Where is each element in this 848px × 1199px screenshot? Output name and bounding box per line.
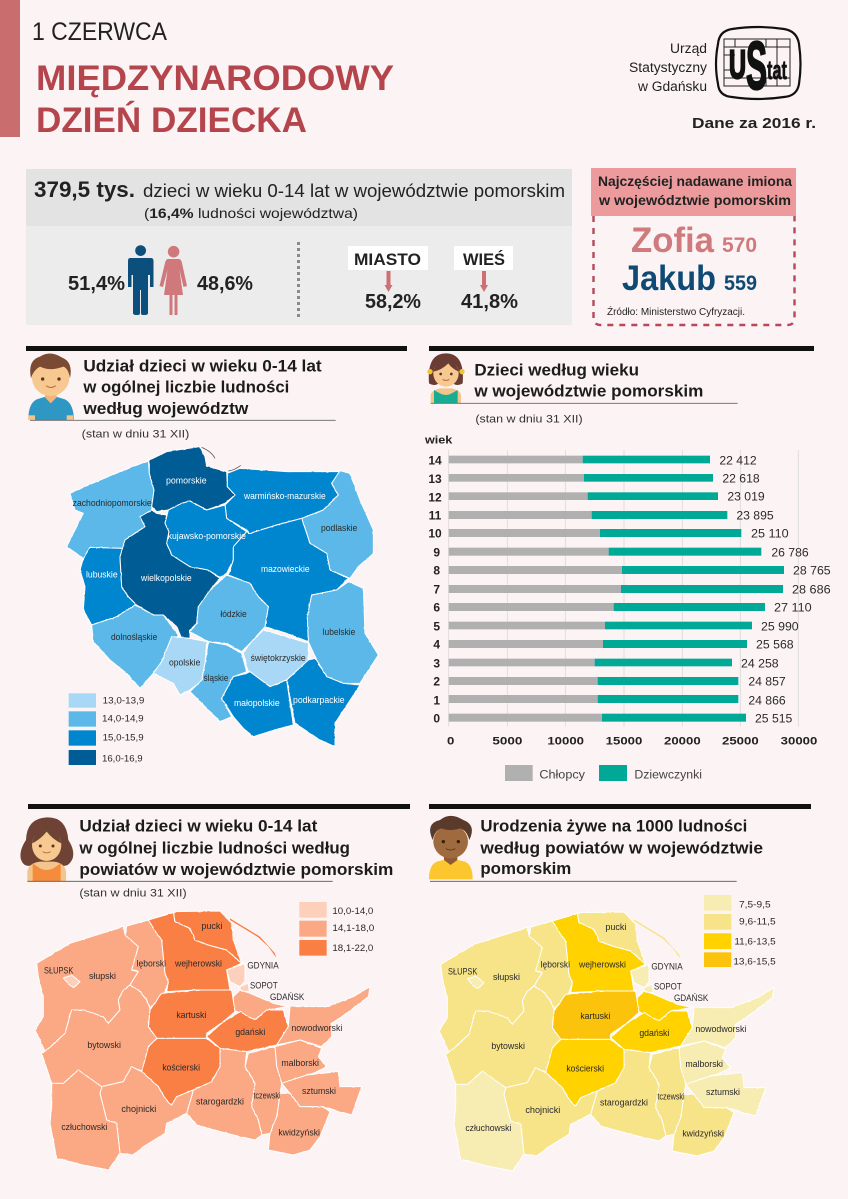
bar chart: 28 686 <box>792 583 831 597</box>
date note: (stan w dniu 31 XII) <box>82 429 190 441</box>
logo: US tat: S <box>746 28 767 104</box>
bar chart: 1 <box>433 693 440 707</box>
map legend <box>704 895 776 967</box>
choropleth map of Poland: zachodniopomorskie <box>73 498 152 508</box>
map legend: 14,0-14,9 <box>102 714 144 724</box>
choropleth map of Poland: łódzkie <box>220 609 247 619</box>
bar chart: 2 <box>433 675 440 689</box>
map: counties, children share: bytowski <box>87 1040 121 1050</box>
map: counties, children share: gdański <box>235 1027 265 1037</box>
choropleth map of Poland: kujawsko-pomorskie <box>168 531 246 541</box>
icon: female figure <box>160 246 187 315</box>
section heading: Dzieci według wieku <box>474 362 639 380</box>
bar chart: 25 990 <box>761 620 799 634</box>
panel: popular names <box>591 168 796 325</box>
date note: (stan w dniu 31 XII) <box>475 414 583 426</box>
map: counties, live births: człuchowski <box>465 1123 511 1133</box>
map: counties, children share: kwidzyński <box>278 1128 320 1138</box>
bar chart: 24 866 <box>748 693 786 707</box>
map: counties, children share: SŁUPSK <box>44 966 73 976</box>
bar chart: 25000 <box>722 735 759 747</box>
bar chart: 24 857 <box>748 675 786 689</box>
bar chart: 11 <box>429 509 442 523</box>
bar chart: 28 765 <box>793 564 831 578</box>
choropleth map of Poland: podkarpackie <box>293 695 345 705</box>
choropleth map of Poland: opolskie <box>169 658 200 668</box>
map legend <box>299 902 374 956</box>
office name: w Gdańsku <box>637 79 707 94</box>
boys share: 51,4% <box>68 273 125 295</box>
section heading <box>479 818 763 878</box>
map legend: 10,0-14,0 <box>332 906 373 916</box>
map: counties, live births: kwidzyński <box>682 1129 724 1139</box>
choropleth map of Poland: mazowieckie <box>261 564 310 574</box>
date heading: 1 CZERWCA <box>32 18 167 46</box>
bar chart: 24 258 <box>741 657 779 671</box>
bar chart: 13 <box>428 472 442 486</box>
choropleth map of Poland: dolnośląskie <box>111 632 157 642</box>
title: DZIEŃ DZIECKA <box>36 100 307 140</box>
choropleth map of Poland: małopolskie <box>234 698 280 708</box>
map: counties, children share <box>35 911 370 1170</box>
title: MIĘDZYNARODOWY <box>36 59 394 98</box>
bar chart: 12 <box>428 490 442 504</box>
chart legend <box>505 765 702 782</box>
map: counties, children share: GDAŃSK <box>270 992 304 1002</box>
names heading: Najczęściej nadawane imiona <box>598 173 792 189</box>
map: counties, live births: kościerski <box>566 1064 604 1074</box>
city label <box>348 246 428 270</box>
bar chart: 0 <box>447 735 454 747</box>
date note: (stan w dniu 31 XII) <box>79 888 187 900</box>
title <box>36 59 394 140</box>
map: counties, live births: gdański <box>639 1028 669 1038</box>
bar chart: 6 <box>433 601 440 615</box>
icon: girl with long hair <box>20 817 73 881</box>
map: counties, live births: nowodworski <box>695 1024 746 1034</box>
name: Zofia: Zofia <box>631 221 715 260</box>
map legend: 15,0-15,9 <box>103 733 144 743</box>
village label: WIEŚ <box>463 250 505 269</box>
map: counties, live births: SŁUPSK <box>448 967 477 977</box>
names heading <box>598 173 792 208</box>
bar chart: 26 786 <box>771 545 809 559</box>
arrow: village <box>480 271 488 292</box>
section heading: w ogólnej liczbie ludności według <box>78 839 350 857</box>
bar chart: 0 <box>433 712 440 726</box>
map: counties, live births: pucki <box>605 922 626 932</box>
name: Jakub: 559 <box>724 272 757 295</box>
choropleth map of Poland: wielkopolskie <box>140 573 192 583</box>
section heading <box>78 818 393 879</box>
section heading <box>82 358 322 418</box>
bar chart: 14 <box>428 454 442 468</box>
bar chart: 5 <box>433 620 440 634</box>
choropleth map of Poland: śląskie <box>204 673 228 683</box>
map: counties, live births: GDAŃSK <box>674 993 708 1003</box>
map: counties, live births <box>439 912 774 1171</box>
arrow: city <box>384 271 392 292</box>
panel: voivodeship map <box>26 346 407 765</box>
age axis title: wiek <box>424 434 453 446</box>
map: counties, children share: kartuski <box>176 1010 206 1020</box>
section heading: Udział dzieci w wieku 0-14 lat <box>83 358 322 376</box>
bar chart: 3 <box>433 657 440 671</box>
bar chart: 4 <box>433 638 440 652</box>
village label <box>454 246 513 270</box>
city label: MIASTO <box>354 250 421 269</box>
map: counties, live births: sztumski <box>706 1087 740 1097</box>
map: counties, children share: GDYNIA <box>247 961 279 971</box>
bar chart: 15000 <box>606 735 642 747</box>
panel: summary <box>26 169 572 325</box>
choropleth map of Poland: pomorskie <box>166 475 207 485</box>
icon: girl <box>427 353 465 403</box>
village share: 41,8% <box>461 291 518 313</box>
choropleth map of Poland: warmińsko-mazurskie <box>243 491 326 501</box>
summary headline <box>34 177 565 202</box>
section heading: w województwie pomorskim <box>473 383 703 401</box>
map: counties, live births: starogardzki <box>600 1098 648 1108</box>
divider <box>297 242 300 318</box>
office name: Statystyczny <box>629 60 707 75</box>
chart legend: Dziewczynki <box>634 768 702 782</box>
logo: US tat: tat <box>767 55 787 85</box>
choropleth map of Poland: świętokrzyskie <box>251 653 306 663</box>
girls share: 48,6% <box>197 273 253 295</box>
map: counties, children share: chojnicki <box>121 1104 156 1114</box>
map: counties, children share: lęborski <box>137 958 166 968</box>
section heading: pomorskim <box>480 860 571 878</box>
map: counties, live births: lęborski <box>541 959 570 969</box>
icon: curly-haired boy <box>429 816 473 879</box>
map: counties, live births: wejherowski <box>578 960 626 970</box>
map: counties, children share: SOPOT <box>250 981 278 991</box>
name: Zofia <box>631 221 757 260</box>
map: counties, children share: tczewski <box>253 1091 281 1101</box>
map: counties, children share: człuchowski <box>61 1122 107 1132</box>
panel: children by age <box>424 346 831 782</box>
bar chart: 7 <box>433 583 440 597</box>
bar chart: 10000 <box>547 735 584 747</box>
bar chart: 20000 <box>664 735 701 747</box>
section heading: Udział dzieci w wieku 0-14 lat <box>79 818 318 836</box>
summary headline: dzieci w wieku 0-14 lat w województwie pomorskim <box>143 181 565 201</box>
section heading: powiatów w województwie pomorskim <box>79 861 393 879</box>
logo: US tat <box>716 27 800 104</box>
bar chart: 23 019 <box>727 490 765 504</box>
map: counties, live births: malborski <box>685 1059 723 1069</box>
section heading: według województw <box>82 400 249 418</box>
map legend: 14,1-18,0 <box>332 923 374 933</box>
bar chart: 25 110 <box>751 527 789 541</box>
map: counties, live births: GDYNIA <box>651 962 683 972</box>
choropleth map of Poland <box>67 447 378 747</box>
map legend: 9,6-11,5 <box>739 916 776 926</box>
map: counties, children share: kościerski <box>162 1063 200 1073</box>
map: counties, live births: SOPOT <box>654 982 682 992</box>
choropleth map of Poland: podlaskie <box>321 523 357 533</box>
bar chart: 23 895 <box>736 509 774 523</box>
map: counties, live births: chojnicki <box>525 1105 560 1115</box>
choropleth map of Poland: lubelskie <box>323 627 355 637</box>
name: Jakub: Jakub <box>622 259 716 298</box>
bar chart: 27 110 <box>774 601 812 615</box>
section heading: Urodzenia żywe na 1000 ludności <box>480 818 747 836</box>
map: counties, live births: tczewski <box>657 1092 685 1102</box>
choropleth map of Poland: lubuskie <box>86 570 118 580</box>
map: counties, children share: wejherowski <box>174 959 222 969</box>
map: counties, children share: malborski <box>281 1058 319 1068</box>
summary share: (16,4% ludności województwa) <box>144 205 358 221</box>
bar chart: 8 <box>433 564 440 578</box>
header accent bar <box>0 0 20 137</box>
bar chart: 9 <box>433 545 440 559</box>
map: counties, live births: kartuski <box>580 1011 610 1021</box>
map legend: 13,0-13,9 <box>103 696 144 706</box>
map: counties, children share: sztumski <box>302 1086 336 1096</box>
map: counties, live births: słupski <box>493 972 520 982</box>
panel: live births by county <box>429 804 811 1171</box>
map legend: 18,1-22,0 <box>332 943 373 953</box>
map: counties, children share: słupski <box>89 971 116 981</box>
bar chart: 22 412 <box>719 454 757 468</box>
section heading: według powiatów w województwie <box>479 839 763 857</box>
icon: boy <box>28 353 74 420</box>
section heading <box>473 362 703 401</box>
office name: Urząd <box>670 41 707 56</box>
map legend: 16,0-16,9 <box>102 754 143 764</box>
bar chart: 25 568 <box>756 638 794 652</box>
data year note: Dane za 2016 r. <box>692 115 816 132</box>
names heading: w województwie pomorskim <box>598 192 791 208</box>
panel: children share by county <box>20 804 410 1170</box>
map: counties, children share: nowodworski <box>291 1023 342 1033</box>
source note: Źródło: Ministerstwo Cyfryzacji. <box>607 305 745 318</box>
bar chart: 5000 <box>492 735 522 747</box>
bar chart <box>428 450 831 747</box>
city share: 58,2% <box>365 291 421 313</box>
map legend: 13,6-15,5 <box>733 956 776 966</box>
bar chart: 22 618 <box>722 472 760 486</box>
office name <box>629 41 707 94</box>
map: counties, live births: bytowski <box>491 1041 525 1051</box>
section heading: w ogólnej liczbie ludności <box>82 379 289 397</box>
logo: US tat: U <box>729 43 746 87</box>
chart legend: Chłopcy <box>539 768 585 782</box>
icon: male figure <box>128 245 154 315</box>
map: counties, children share: starogardzki <box>196 1097 244 1107</box>
bar chart: 30000 <box>781 735 817 747</box>
map legend: 11,6-13,5 <box>734 936 776 946</box>
bar chart: 10 <box>428 527 442 541</box>
map legend <box>69 693 144 765</box>
bar chart: 25 515 <box>755 712 793 726</box>
map: counties, children share: pucki <box>201 921 222 931</box>
summary headline: 379,5 tys. <box>34 177 135 202</box>
map legend: 7,5-9,5 <box>739 899 771 909</box>
name: Zofia: 570 <box>722 234 757 257</box>
